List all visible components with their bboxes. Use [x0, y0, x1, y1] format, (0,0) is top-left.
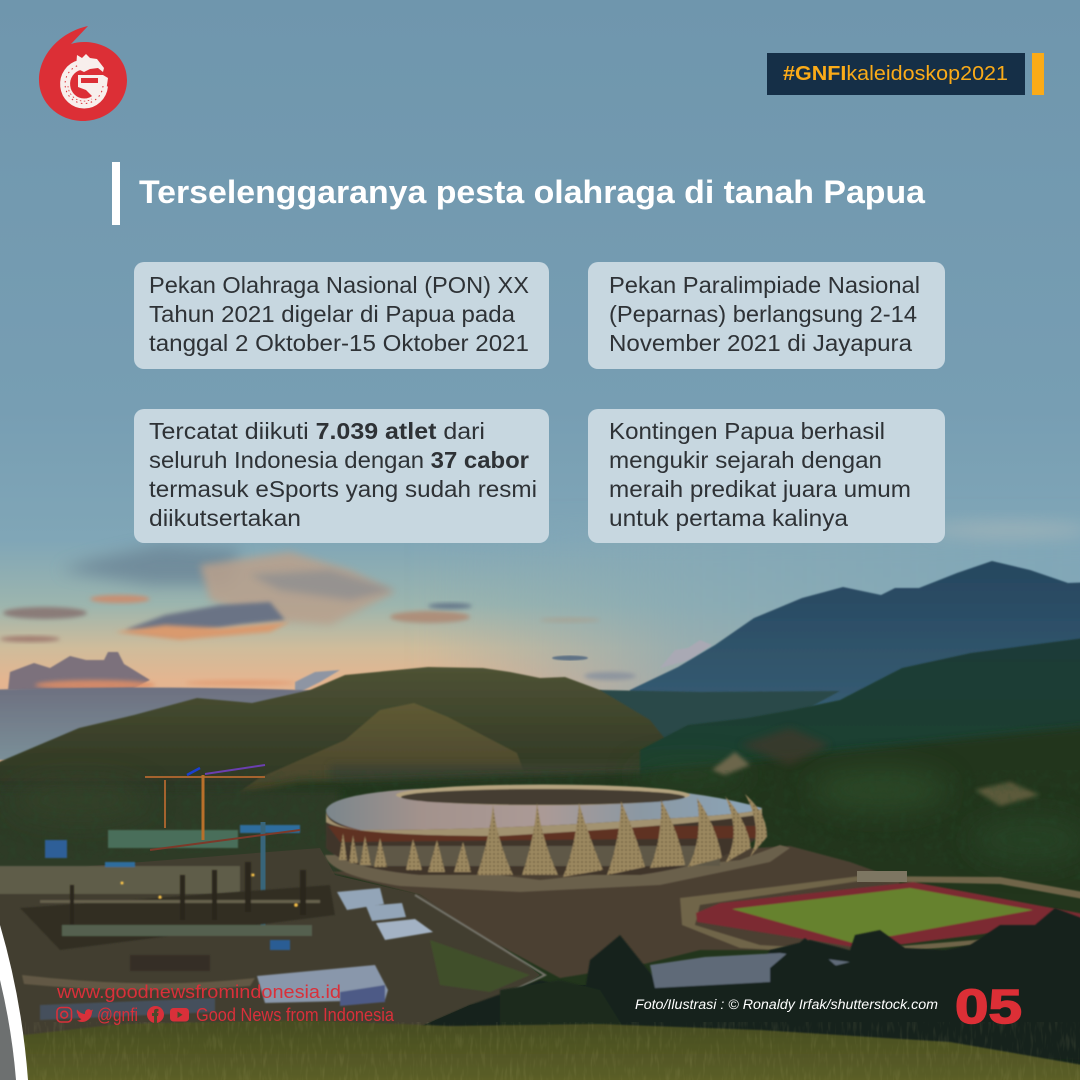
- logo garuda G mark: [65, 54, 108, 104]
- right clearing patches: [712, 728, 1040, 806]
- panel text: (Peparnas) berlangsung 2-14: [609, 301, 917, 327]
- green building complex: [0, 825, 300, 894]
- panel text: November 2021 di Jayapura: [609, 330, 913, 356]
- forest highlights: [10, 763, 1080, 864]
- far blue mountain: [630, 561, 1080, 760]
- foreground grass: [15, 1020, 1080, 1080]
- panel text: mengukir sejarah dengan: [609, 447, 882, 473]
- hashtag box: [767, 53, 1025, 95]
- website url: www.goodnewsfromindonesia.id: [56, 981, 341, 1002]
- icon: youtube: [170, 1008, 189, 1022]
- distant haze layer: [0, 688, 500, 760]
- bottom-left white shape: [0, 925, 28, 1080]
- hashtag badge: [767, 53, 1044, 95]
- logo red droplet: [39, 26, 127, 121]
- panel text: termasuk eSports yang sudah resmi: [149, 476, 537, 502]
- stadium: [325, 784, 790, 892]
- forest texture: [328, 770, 1012, 790]
- panel text: [609, 418, 911, 531]
- panel text: Pekan Paralimpiade Nasional: [609, 272, 920, 298]
- right forest hill: [640, 636, 1080, 900]
- orange accent bar: [1032, 53, 1044, 95]
- left forest band: [0, 790, 340, 880]
- panel: athletes and sports: [134, 409, 549, 543]
- panel text: [149, 272, 529, 356]
- heading: [112, 162, 926, 225]
- stadium base and apron: [325, 845, 790, 892]
- panel text: Tercatat diikuti 7.039 atlet dari: [149, 418, 485, 444]
- running track and football field: [680, 876, 1080, 955]
- panel text: Pekan Olahraga Nasional (PON) XX: [149, 272, 529, 298]
- construction site structures: [20, 862, 335, 990]
- panel text: meraih predikat juara umum: [609, 476, 911, 502]
- field: [732, 888, 1033, 943]
- panel: Peparnas: [588, 262, 945, 369]
- icon: instagram: [57, 1008, 72, 1022]
- left green hill: [0, 667, 670, 810]
- grass texture: [25, 1022, 1080, 1080]
- stadium facade: [326, 812, 766, 875]
- panel text: untuk pertama kalinya: [609, 505, 849, 531]
- mid blue ridge: [560, 690, 840, 745]
- brown hill slope: [235, 703, 525, 805]
- embankment wall: [680, 876, 1080, 955]
- icon: twitter: [77, 1009, 93, 1022]
- background photo: stadium in Papua at sunset: [0, 425, 1080, 1080]
- heading text: Terselenggaranya pesta olahraga di tanah Papua: [139, 174, 926, 210]
- panel text: seluruh Indonesia dengan 37 cabor: [149, 447, 529, 473]
- hashtag text: #GNFIkaleidoskop2021: [783, 63, 1008, 85]
- valley village strip: [330, 765, 660, 785]
- foreground trees: [390, 908, 1080, 1060]
- icon: facebook: [147, 1006, 164, 1023]
- page name: Good News from Indonesia: [196, 1005, 395, 1025]
- white site buildings: [40, 888, 545, 1020]
- photo credit: Foto/Ilustrasi : © Ronaldy Irfak/shutterstock.com: [635, 997, 938, 1012]
- panel text: [149, 418, 537, 531]
- page number: 05: [955, 981, 1022, 1034]
- panel: PON XX: [134, 262, 549, 369]
- footer links: [56, 981, 395, 1025]
- stadium sail facades: [339, 794, 767, 877]
- construction ground left: [0, 848, 540, 1040]
- panel text: Kontingen Papua berhasil: [609, 418, 885, 444]
- panel text: tanggal 2 Oktober-15 Oktober 2021: [149, 330, 529, 356]
- stadium opening: [396, 784, 690, 806]
- stadium roof: [326, 786, 762, 830]
- heading accent bar: [112, 162, 120, 225]
- trackside pavilion: [857, 871, 907, 882]
- ground right of stadium: [330, 846, 900, 978]
- tower cranes: [145, 765, 300, 935]
- logo: [39, 26, 127, 121]
- panel text: diikutsertakan: [149, 505, 301, 531]
- panel: Papua champion: [588, 409, 945, 543]
- foreground dark base: [390, 960, 1080, 1080]
- track: [696, 882, 1080, 947]
- panel text: [609, 272, 920, 356]
- valley forest floor: [0, 725, 1080, 1050]
- sunset clouds: [0, 545, 712, 692]
- twitter handle: @gnfi: [97, 1005, 138, 1025]
- panel text: Tahun 2021 digelar di Papua pada: [149, 301, 516, 327]
